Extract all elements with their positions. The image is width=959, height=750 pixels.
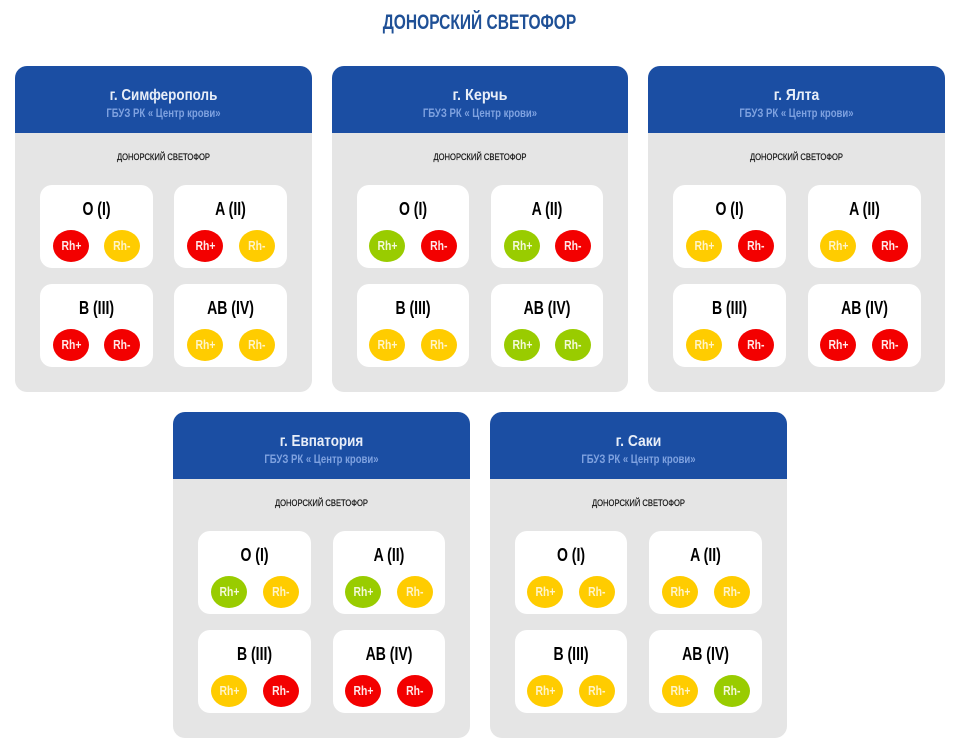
blood group B (III): Rh+ xyxy=(61,337,81,352)
blood group AB (IV): AB (IV) xyxy=(366,644,412,664)
panel: Ялта xyxy=(648,66,945,392)
blood group B (III): Rh+ xyxy=(377,337,397,352)
city name: г. Ялта xyxy=(774,87,819,104)
blood group O (I): Rh- xyxy=(588,584,606,599)
blood group AB (IV): AB (IV) xyxy=(524,298,570,318)
city name: г. Симферополь xyxy=(110,87,217,104)
blood group B (III): Rh- xyxy=(430,337,448,352)
blood group A (II): Rh- xyxy=(881,238,899,253)
blood group AB (IV): Rh- xyxy=(723,683,741,698)
blood group AB (IV): AB (IV) xyxy=(682,644,729,664)
blood group AB (IV) xyxy=(491,284,603,367)
header: Евпатория xyxy=(173,412,470,479)
blood group A (II): Rh+ xyxy=(512,238,532,253)
blood group O (I): Rh- xyxy=(113,238,131,253)
blood group A (II): A (II) xyxy=(690,545,721,565)
blood group A (II): Rh- xyxy=(406,584,424,599)
blood group A (II): Rh+ xyxy=(195,238,215,253)
blood group A (II) xyxy=(333,531,445,614)
panel subheading: ДОНОРСКИЙ СВЕТОФОР xyxy=(750,152,843,163)
organisation: ГБУЗ РК « Центр крови» xyxy=(581,454,696,466)
blood group O (I): Rh+ xyxy=(377,238,397,253)
blood group A (II): A (II) xyxy=(532,199,562,219)
panel subheading: ДОНОРСКИЙ СВЕТОФОР xyxy=(117,152,210,163)
panel subheading: ДОНОРСКИЙ СВЕТОФОР xyxy=(275,498,368,509)
blood group O (I): Rh+ xyxy=(61,238,81,253)
header: Ялта xyxy=(648,66,945,133)
blood group A (II) xyxy=(491,185,603,268)
blood group A (II) xyxy=(174,185,287,268)
header: Саки xyxy=(490,412,787,479)
blood group B (III): B (III) xyxy=(237,644,272,664)
blood group O (I) xyxy=(515,531,627,614)
blood group B (III): B (III) xyxy=(553,644,589,664)
blood group A (II): Rh- xyxy=(564,238,582,253)
city name: г. Керчь xyxy=(452,87,508,104)
blood group B (III): B (III) xyxy=(395,298,431,318)
blood group A (II): A (II) xyxy=(215,199,246,219)
blood group AB (IV) xyxy=(808,284,921,367)
blood group O (I): O (I) xyxy=(715,199,744,219)
blood group A (II): Rh- xyxy=(723,584,741,599)
blood group O (I) xyxy=(40,185,153,268)
blood group O (I): Rh- xyxy=(430,238,448,253)
blood group B (III) xyxy=(357,284,469,367)
city name: г. Саки xyxy=(616,433,661,450)
panel: Евпатория xyxy=(173,412,470,738)
blood group AB (IV): AB (IV) xyxy=(207,298,254,318)
panel: Симферополь xyxy=(15,66,312,392)
organisation: ГБУЗ РК « Центр крови» xyxy=(739,108,854,120)
blood group AB (IV): Rh+ xyxy=(828,337,848,352)
blood group O (I): O (I) xyxy=(399,199,427,219)
blood group AB (IV): Rh+ xyxy=(195,337,215,352)
blood group A (II): Rh+ xyxy=(353,584,373,599)
blood group B (III): Rh- xyxy=(588,683,606,698)
blood group A (II): Rh+ xyxy=(670,584,690,599)
blood group O (I) xyxy=(673,185,786,268)
title: ДОНОРСКИЙ СВЕТОФОР xyxy=(383,11,576,34)
blood group B (III): Rh- xyxy=(747,337,765,352)
blood group O (I) xyxy=(357,185,469,268)
blood group O (I): Rh+ xyxy=(219,584,239,599)
blood group B (III) xyxy=(198,630,311,713)
blood group AB (IV): Rh- xyxy=(881,337,899,352)
blood group AB (IV): Rh+ xyxy=(670,683,690,698)
blood group A (II): A (II) xyxy=(849,199,880,219)
panel: Керчь xyxy=(332,66,628,392)
blood group A (II) xyxy=(649,531,762,614)
blood group A (II): Rh+ xyxy=(828,238,848,253)
blood group O (I): Rh- xyxy=(747,238,765,253)
blood group AB (IV): Rh- xyxy=(248,337,266,352)
blood group B (III) xyxy=(515,630,627,713)
blood group AB (IV): AB (IV) xyxy=(841,298,888,318)
blood group O (I): O (I) xyxy=(82,199,111,219)
organisation: ГБУЗ РК « Центр крови» xyxy=(423,108,537,120)
blood group B (III): B (III) xyxy=(712,298,747,318)
blood group AB (IV): Rh+ xyxy=(512,337,532,352)
blood group A (II): Rh- xyxy=(248,238,266,253)
blood group AB (IV): Rh- xyxy=(564,337,582,352)
organisation: ГБУЗ РК « Центр крови» xyxy=(106,108,221,120)
blood group O (I): Rh+ xyxy=(535,584,555,599)
panel: Саки xyxy=(490,412,787,738)
organisation: ГБУЗ РК « Центр крови» xyxy=(264,454,379,466)
blood group AB (IV) xyxy=(174,284,287,367)
header: Симферополь xyxy=(15,66,312,133)
blood group O (I): O (I) xyxy=(557,545,585,565)
blood group B (III) xyxy=(40,284,153,367)
blood group B (III): Rh+ xyxy=(219,683,239,698)
blood group B (III): Rh+ xyxy=(535,683,555,698)
city name: г. Евпатория xyxy=(280,433,363,450)
blood group B (III): Rh+ xyxy=(694,337,714,352)
blood group O (I): Rh- xyxy=(272,584,290,599)
blood group AB (IV): Rh+ xyxy=(353,683,373,698)
panel subheading: ДОНОРСКИЙ СВЕТОФОР xyxy=(434,152,526,163)
panel subheading: ДОНОРСКИЙ СВЕТОФОР xyxy=(592,498,685,509)
blood group AB (IV) xyxy=(649,630,762,713)
blood group B (III): B (III) xyxy=(79,298,114,318)
blood group O (I) xyxy=(198,531,311,614)
blood group AB (IV) xyxy=(333,630,445,713)
blood group O (I): Rh+ xyxy=(694,238,714,253)
blood group B (III) xyxy=(673,284,786,367)
blood group AB (IV): Rh- xyxy=(406,683,424,698)
header: Керчь xyxy=(332,66,628,133)
blood group O (I): O (I) xyxy=(240,545,269,565)
blood group B (III): Rh- xyxy=(272,683,290,698)
blood group B (III): Rh- xyxy=(113,337,131,352)
blood group A (II): A (II) xyxy=(374,545,404,565)
blood group A (II) xyxy=(808,185,921,268)
